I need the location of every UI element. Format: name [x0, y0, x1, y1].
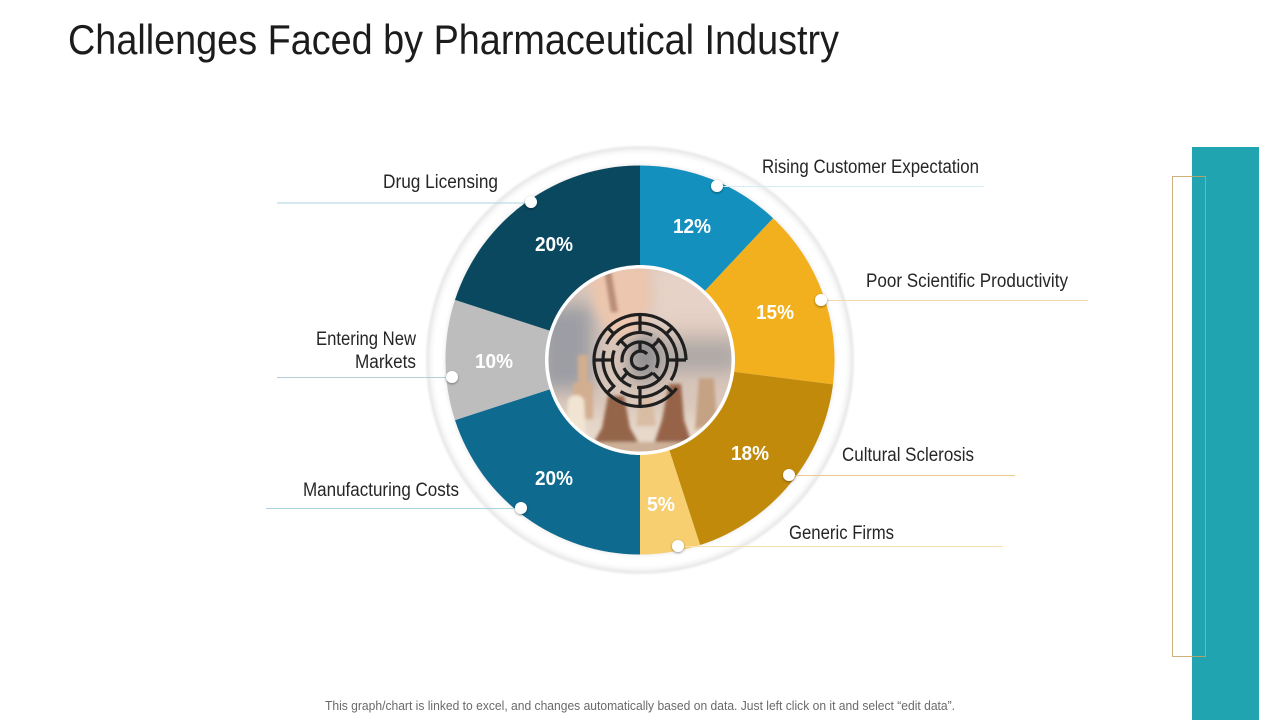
icon: circular maze [588, 308, 692, 412]
callout: Generic Firms [672, 523, 1003, 552]
slice: rising customer expectation 12% [640, 166, 773, 360]
panel: outlined side frame [1172, 176, 1206, 656]
callout: Poor Scientific Productivity [815, 271, 1088, 306]
callout: Drug Licensing [277, 172, 537, 208]
callout: Rising Customer Expectation: Rising Customer Expectation [762, 157, 979, 178]
value: 18%: 18% [731, 443, 769, 465]
callout: Entering New Markets: Entering New [316, 329, 416, 350]
percentage labels [475, 216, 794, 516]
slice: drug licensing 20% [455, 166, 640, 360]
callout: Rising Customer Expectation [711, 157, 984, 192]
value: 12%: 12% [673, 216, 711, 238]
value: 10%: 10% [475, 351, 513, 373]
value: 15%: 15% [756, 302, 794, 324]
callout: Drug Licensing: Drug Licensing [383, 172, 498, 193]
value: 5%: 5% [647, 494, 675, 516]
callout: Entering New Markets: Markets [355, 352, 416, 373]
callout: Poor Scientific Productivity: Poor Scientific Productivity [866, 271, 1068, 292]
footnote: This graph/chart is linked to excel, and changes automatically based on data. Just left click on it and select “edit data”. [325, 699, 955, 713]
callout: Manufacturing Costs: Manufacturing Costs [303, 480, 459, 501]
callout: Manufacturing Costs [266, 480, 527, 514]
callout: Cultural Sclerosis: Cultural Sclerosis [842, 445, 974, 466]
callout: Generic Firms: Generic Firms [789, 523, 894, 544]
value: 20% manufacturing: 20% [535, 468, 573, 490]
slice: generic firms 5% [640, 360, 700, 555]
title: Challenges Faced by Pharmaceutical Industry [68, 16, 839, 63]
slice: manufacturing costs 20% [455, 360, 640, 554]
donut chart [428, 148, 852, 572]
panel: teal side bar [1192, 147, 1259, 720]
callout: Cultural Sclerosis [783, 445, 1015, 481]
value: 20% licensing: 20% [535, 234, 573, 256]
slice: poor scientific productivity 15% [640, 218, 835, 384]
slice: cultural sclerosis 18% [640, 360, 833, 545]
outer ring [428, 148, 852, 572]
callout: Entering New Markets [277, 329, 458, 383]
slice: entering new markets 10% [445, 300, 640, 420]
center photo: chess pieces and hand [538, 262, 740, 460]
